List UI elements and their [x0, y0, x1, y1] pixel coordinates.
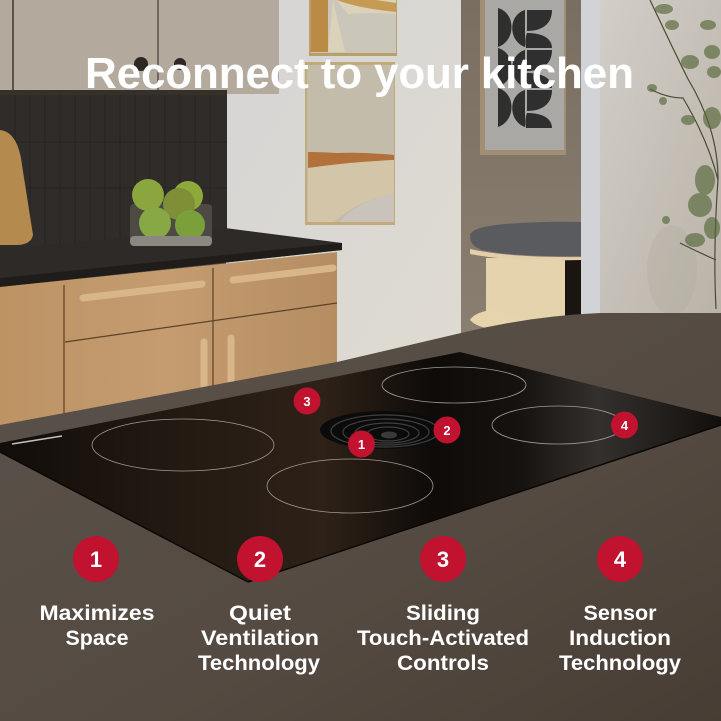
- bench: [470, 222, 582, 331]
- marker 3 on cooktop: 3: [303, 394, 311, 409]
- feature 3: sliding touch-activated controls: Touch-Activated: [357, 627, 529, 650]
- feature 4: sensor induction technology: Sensor: [584, 602, 656, 625]
- feature 4: sensor induction technology: Induction: [569, 627, 671, 650]
- wall: [226, 0, 462, 375]
- feature 4: sensor induction technology: 4: [614, 547, 627, 572]
- feature 3: sliding touch-activated controls: [357, 536, 529, 675]
- kitchen worktop: [0, 228, 342, 287]
- feature 1: maximizes space: Space: [66, 627, 128, 650]
- feature 2: quiet ventilation technology: Quiet: [229, 602, 291, 625]
- alcove: [461, 0, 582, 345]
- bowl of apples: [130, 179, 212, 246]
- painting one: [309, 0, 397, 56]
- feature 2: quiet ventilation technology: [198, 536, 320, 675]
- plant: [647, 0, 721, 315]
- logo: [12, 436, 62, 444]
- right wall: [600, 0, 721, 330]
- feature 3: sliding touch-activated controls: Sliding: [406, 602, 480, 625]
- marker 2 on cooktop: 2: [443, 423, 451, 438]
- island countertop: [0, 313, 721, 721]
- feature 1: maximizes space: 1: [90, 547, 102, 572]
- feature 4: sensor induction technology: [559, 536, 681, 675]
- marker 1 on cooktop: [348, 430, 375, 458]
- downdraft vent: [320, 411, 446, 449]
- backsplash: [0, 95, 227, 250]
- feature 2: quiet ventilation technology: 2: [254, 547, 266, 572]
- feature 2: quiet ventilation technology: Ventilation: [201, 627, 319, 650]
- wood base cabinets: [0, 252, 337, 440]
- feature 4: sensor induction technology: Technology: [559, 652, 681, 675]
- marker 4 on cooktop: [611, 412, 638, 438]
- marker 2 on cooktop: [434, 416, 460, 444]
- induction cooktop: [0, 352, 721, 582]
- cutting board: [0, 130, 33, 245]
- framed geometric art: [480, 0, 566, 155]
- marker 4 on cooktop: 4: [621, 418, 629, 433]
- feature 2: quiet ventilation technology: Technology: [198, 652, 320, 675]
- white pillar: [581, 0, 601, 330]
- marker 1 on cooktop: 1: [358, 437, 365, 452]
- feature 1: maximizes space: Maximizes: [40, 602, 154, 625]
- painting two: [305, 62, 395, 225]
- title: Reconnect to your kitchen: [85, 49, 634, 98]
- feature 3: sliding touch-activated controls: Controls: [397, 652, 489, 675]
- upper cabinets: [0, 0, 279, 95]
- marker 3 on cooktop: [294, 388, 320, 414]
- feature 3: sliding touch-activated controls: 3: [437, 547, 449, 572]
- cooking zones: [92, 367, 624, 513]
- feature 1: maximizes space: [40, 536, 154, 650]
- drawer handles: [83, 268, 333, 386]
